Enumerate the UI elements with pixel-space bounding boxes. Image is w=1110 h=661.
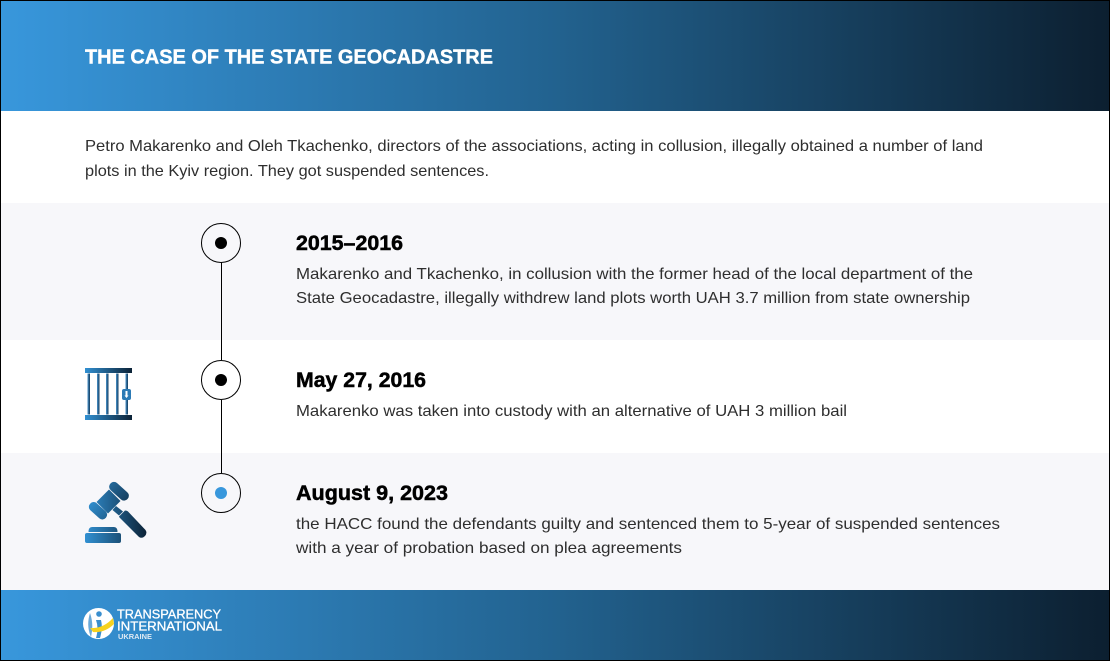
timeline marker 3 bbox=[202, 474, 240, 512]
icon: prison bars bbox=[85, 368, 132, 420]
entry: August 9, 2023: the HACC found the defendants guilty and sentenced them to 5-year of suspended sentences bbox=[296, 516, 1000, 533]
intro text: Petro Makarenko and Oleh Tkachenko, directors of the associations, acting in collusion, illegally obtained a number of land bbox=[85, 138, 983, 155]
entry: August 9, 2023: August 9, 2023 bbox=[296, 482, 448, 505]
timeline marker 1 bbox=[202, 224, 240, 262]
timeline connector bbox=[220, 262, 222, 473]
logo: Transparency International Ukraine: TRANSPARENCY bbox=[117, 606, 221, 622]
panel: August 9, 2023 background bbox=[1, 453, 1109, 590]
intro text bbox=[85, 138, 983, 180]
panel: header band bbox=[1, 1, 1109, 111]
intro text: plots in the Kyiv region. They got suspended sentences. bbox=[85, 163, 489, 180]
entry: May 27, 2016: May 27, 2016 bbox=[296, 369, 426, 392]
logo: Transparency International Ukraine bbox=[83, 606, 222, 641]
entry: August 9, 2023 bbox=[295, 482, 1000, 557]
logo: Transparency International Ukraine: INTERNATIONAL bbox=[117, 618, 222, 634]
title: THE CASE OF THE STATE GEOCADASTRE bbox=[85, 46, 493, 68]
logo: Transparency International Ukraine: UKRAINE bbox=[118, 634, 152, 641]
panel: footer band bbox=[1, 590, 1109, 660]
entry: 2015–2016: Makarenko and Tkachenko, in collusion with the former head of the local department of the bbox=[296, 266, 973, 283]
entry: May 27, 2016 bbox=[296, 369, 847, 420]
entry: 2015–2016: 2015–2016 bbox=[296, 232, 403, 255]
timeline marker 2 bbox=[202, 360, 240, 400]
entry: 2015–2016 bbox=[296, 232, 973, 307]
entry: May 27, 2016: Makarenko was taken into custody with an alternative of UAH 3 million bail bbox=[296, 403, 847, 420]
icon: gavel bbox=[85, 480, 146, 543]
entry: August 9, 2023: with a year of probation based on plea agreements bbox=[295, 540, 682, 557]
entry: 2015–2016: State Geocadastre, illegally withdrew land plots worth UAH 3.7 million from state ownership bbox=[296, 290, 970, 307]
panel: 2015–2016 background bbox=[1, 203, 1109, 340]
